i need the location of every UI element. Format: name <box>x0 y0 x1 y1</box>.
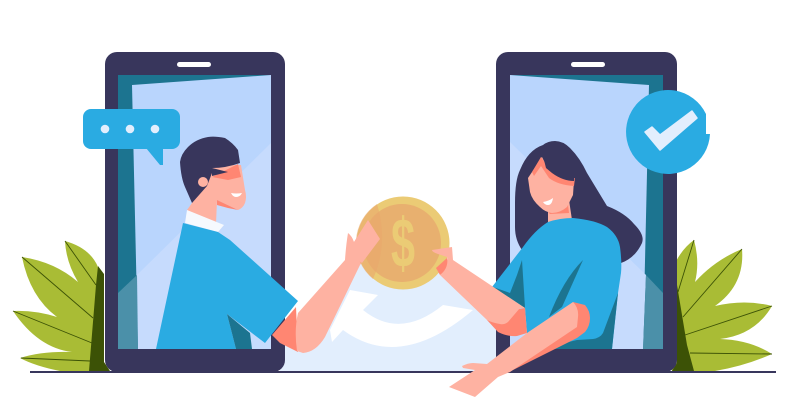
left plant <box>13 241 110 371</box>
rear arm <box>432 247 525 324</box>
arm <box>296 220 380 353</box>
hair <box>515 141 643 280</box>
face and neck <box>187 165 246 224</box>
woman <box>30 141 776 397</box>
coin <box>356 196 450 290</box>
man's hand over coin <box>350 220 380 263</box>
smile <box>231 193 242 197</box>
door panel <box>510 75 649 349</box>
check badge <box>626 90 710 174</box>
jaw shadow <box>217 200 238 210</box>
smile <box>543 198 553 205</box>
ear <box>198 177 208 187</box>
forehead shadow <box>212 164 241 180</box>
background blob <box>280 262 500 371</box>
man <box>156 137 380 353</box>
shirt <box>492 218 621 349</box>
bangs <box>541 148 576 181</box>
hairline shadow <box>532 157 575 186</box>
dollar sign: $ <box>391 206 415 283</box>
shirt <box>156 223 298 349</box>
right plant <box>672 240 772 371</box>
ground line <box>30 371 776 373</box>
face <box>528 157 574 213</box>
front sleeve shadow <box>500 302 590 373</box>
shirt folds <box>493 260 525 308</box>
left phone <box>105 52 285 372</box>
exchange arrows <box>330 290 473 347</box>
neck <box>548 200 572 224</box>
hair <box>180 137 240 203</box>
door panel <box>132 75 271 349</box>
front arm <box>449 302 578 397</box>
speech bubble <box>83 109 180 165</box>
right phone <box>496 52 677 372</box>
collar <box>185 210 224 232</box>
sleeve cuff <box>272 307 298 352</box>
rear arm shadow <box>487 308 527 336</box>
